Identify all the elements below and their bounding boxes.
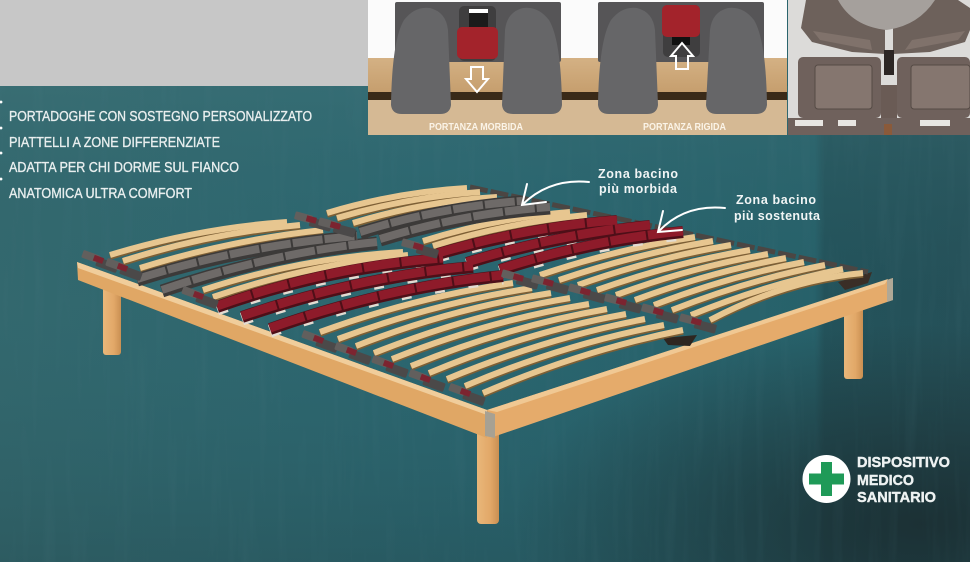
feature list: PORTADOGHE CON SOSTEGNO PERSONALIZZATO (9, 109, 312, 125)
feature list (0, 101, 312, 202)
red firm zone plates (217, 220, 683, 331)
arrow: firmer zone (658, 207, 725, 232)
label: portanza morbida: PORTANZA MORBIDA (429, 122, 523, 133)
legs (103, 285, 863, 524)
back edge connector strip (470, 187, 868, 272)
edge connectors, front side (80, 250, 487, 406)
callout: softer pelvic zone (598, 167, 678, 196)
badge text (857, 455, 950, 506)
soft support plate (391, 2, 562, 114)
bed frame with legs and slats (77, 187, 893, 524)
photo panel: plate close-up (788, 0, 970, 135)
wood slats (110, 188, 863, 393)
wood slats shadow (110, 190, 863, 394)
badge text: DISPOSITIVO (857, 455, 950, 471)
badge text: MEDICO (857, 473, 914, 489)
spine connectors, center line (293, 211, 718, 334)
badge: medical device (802, 455, 950, 506)
callout: softer pelvic zone: più morbida (599, 182, 678, 196)
callout: softer pelvic zone: Zona bacino (598, 167, 678, 181)
icon: down arrow (466, 67, 488, 92)
callout: firmer pelvic zone: più sostenuta (734, 209, 821, 223)
icon: up arrow (671, 43, 693, 69)
feature list: ANATOMICA ULTRA COMFORT (9, 186, 192, 202)
photo panel: load adjustment detail (368, 0, 787, 135)
badge text: SANITARIO (857, 490, 936, 506)
callout: firmer pelvic zone: Zona bacino (736, 193, 816, 207)
gray soft zone plates (137, 201, 550, 291)
label: portanza rigida: PORTANZA RIGIDA (643, 122, 726, 133)
firm support plate (598, 2, 767, 114)
frame rails (77, 262, 893, 438)
arrow: softer zone (522, 181, 589, 205)
feature list: ADATTA PER CHI DORME SUL FIANCO (9, 160, 239, 176)
callout: firmer pelvic zone (734, 193, 821, 223)
bullet dots (0, 101, 2, 180)
feature list: PIATTELLI A ZONE DIFFERENZIATE (9, 135, 220, 151)
icon: green cross (802, 455, 850, 503)
gray top band (0, 0, 368, 86)
